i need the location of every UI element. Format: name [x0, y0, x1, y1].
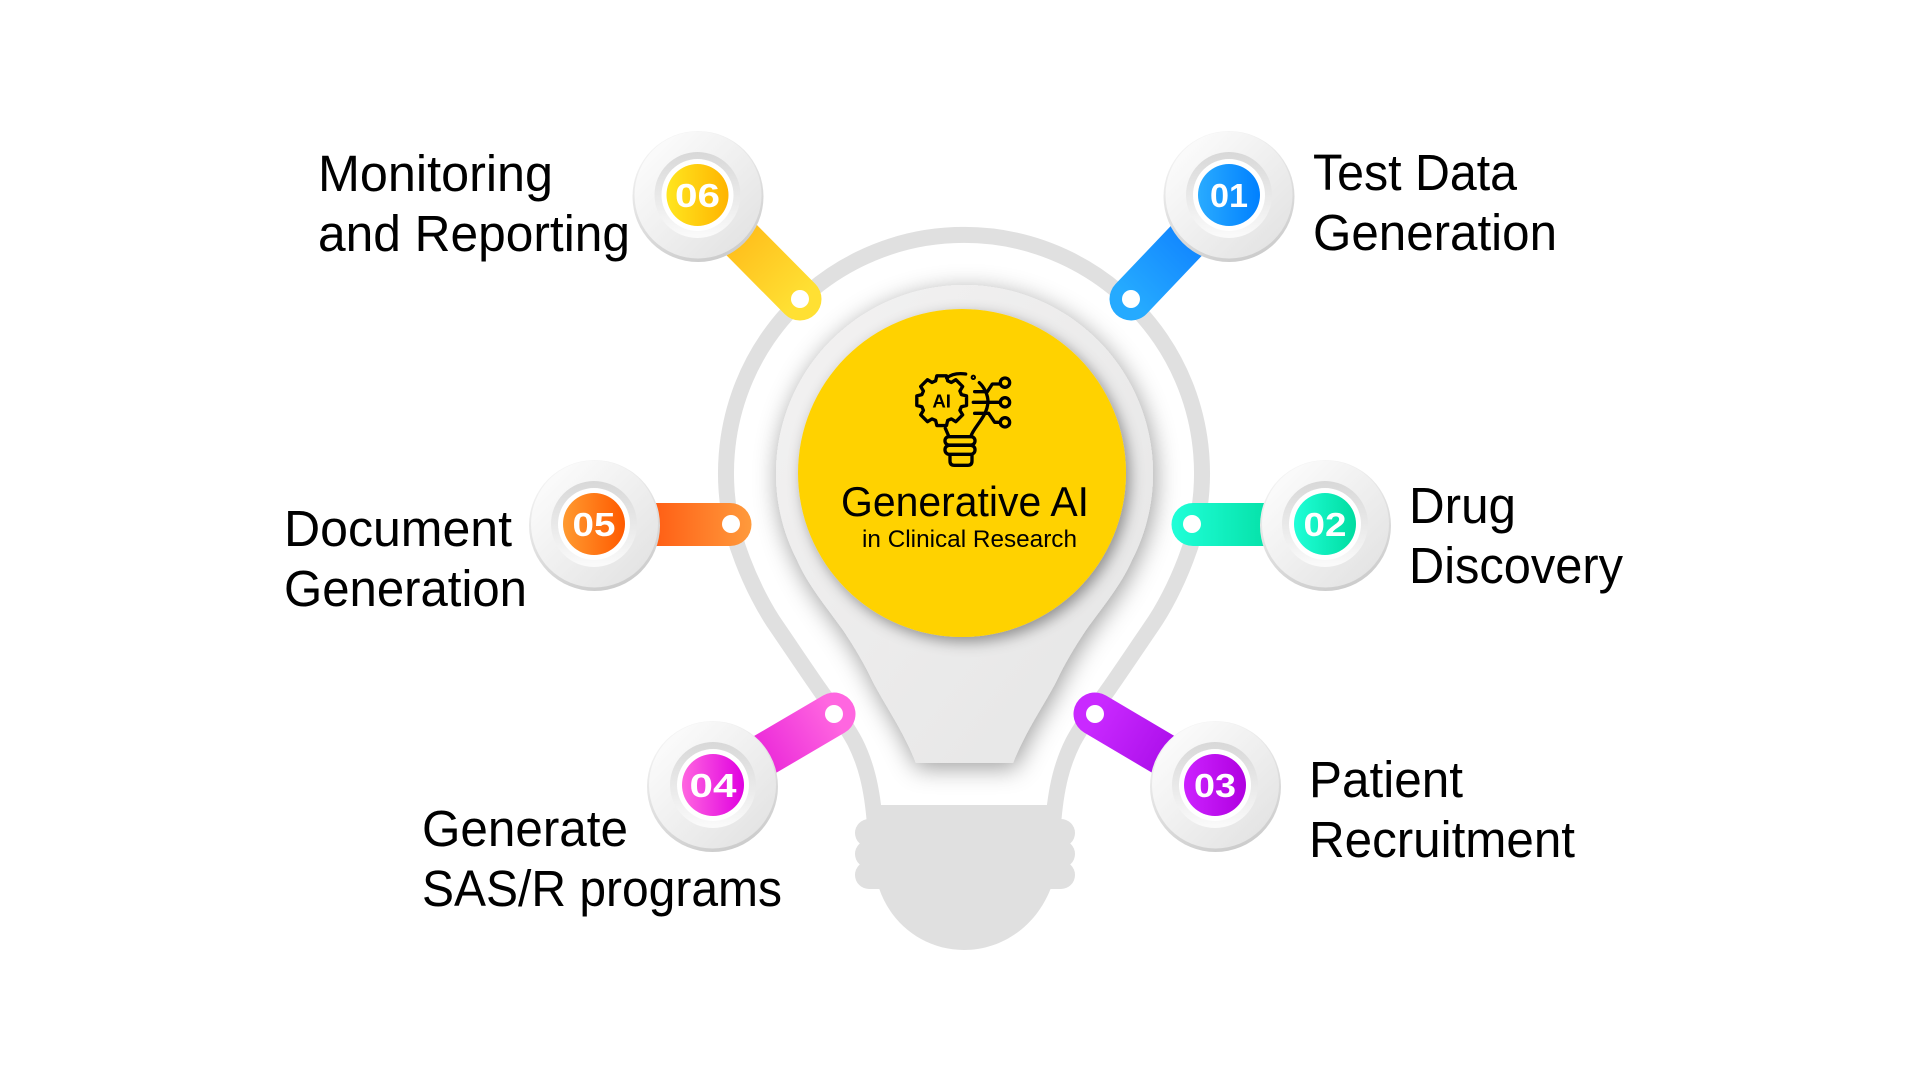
icon: AI light bulb	[917, 374, 1010, 465]
label: Test Data Generation: Generation	[1313, 204, 1557, 261]
connector tab 01	[1122, 196, 1229, 308]
badge 04	[647, 721, 778, 852]
label: Generate SAS/R programs: SAS/R programs	[422, 860, 782, 917]
badge 01: 01	[1210, 177, 1248, 214]
badge 05	[529, 460, 660, 591]
label: Patient Recruitment: Patient	[1309, 751, 1463, 808]
label: Document Generation: Generation	[284, 560, 527, 617]
label: Generate SAS/R programs	[422, 800, 782, 917]
label: Test Data Generation	[1313, 144, 1557, 261]
badge 01	[1164, 131, 1294, 262]
central yellow circle	[798, 309, 1126, 637]
connector tab 04	[713, 705, 843, 785]
connector tab 03	[1086, 705, 1215, 785]
badge 04: 04	[690, 767, 737, 804]
bulb screw base	[855, 805, 1075, 950]
label: Monitoring and Reporting: Monitoring	[318, 145, 553, 202]
center title	[841, 478, 1089, 553]
label: Drug Discovery: Discovery	[1409, 537, 1623, 594]
connector tab 05	[620, 515, 740, 533]
badge 03	[1150, 721, 1281, 852]
center title: in Clinical Research	[862, 526, 1077, 553]
label: Drug Discovery: Drug	[1409, 477, 1516, 534]
label: Drug Discovery	[1409, 477, 1623, 594]
bulb outline	[726, 235, 1202, 825]
label: Monitoring and Reporting	[318, 145, 630, 262]
label: Patient Recruitment: Recruitment	[1309, 811, 1575, 868]
badge 05: 05	[572, 506, 616, 543]
label: Generate SAS/R programs: Generate	[422, 800, 628, 857]
label: Test Data Generation: Test Data	[1313, 144, 1518, 201]
label: Monitoring and Reporting: and Reporting	[318, 205, 630, 262]
icon: AI light bulb: AI	[932, 391, 951, 412]
badge 02	[1260, 460, 1391, 591]
label: Document Generation: Document	[284, 500, 512, 557]
inner bulb	[776, 285, 1153, 763]
connector tab 06	[698, 196, 809, 308]
label: Document Generation	[284, 500, 527, 617]
badge 03: 03	[1194, 767, 1236, 804]
center title: Generative AI	[841, 478, 1089, 525]
badge 06	[632, 131, 764, 262]
label: Patient Recruitment	[1309, 751, 1575, 868]
connector tab 02	[1183, 515, 1300, 533]
badge 06: 06	[675, 177, 720, 214]
badge 02: 02	[1304, 506, 1346, 543]
